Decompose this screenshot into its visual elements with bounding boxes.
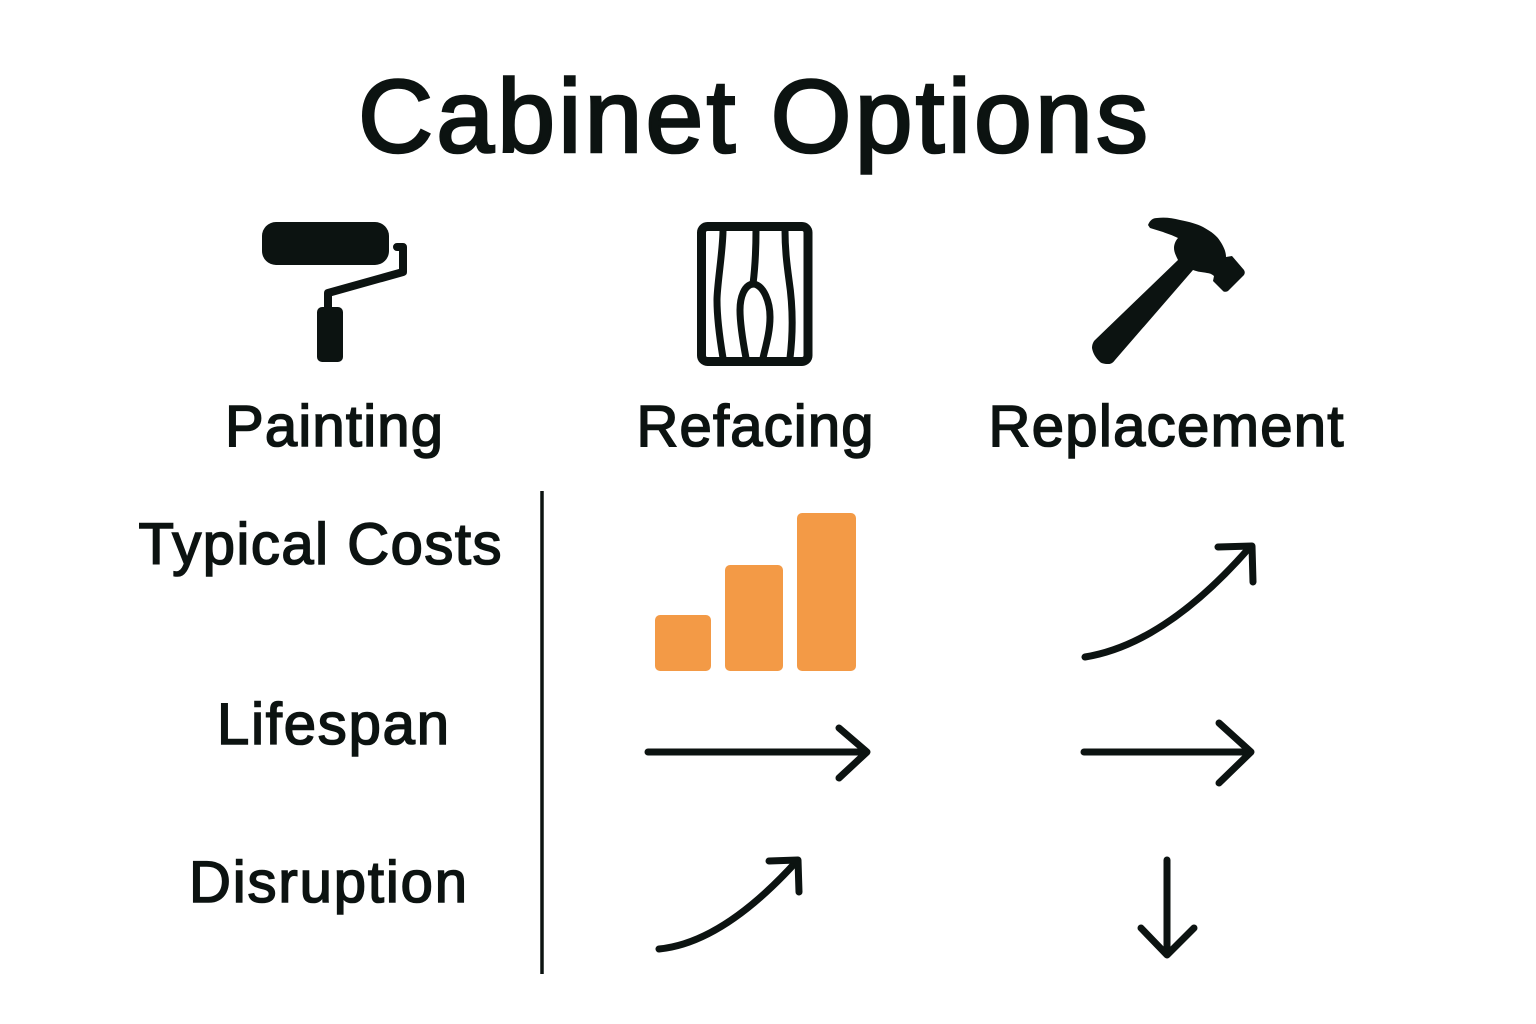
bar chart: typical costs (655, 513, 856, 671)
arrow: replacement disruption down (1141, 860, 1194, 955)
heading: Refacing: Refacing (636, 394, 874, 459)
vertical divider (540, 491, 544, 974)
arrow: replacement cost rising (1085, 546, 1253, 657)
icon: hammer (1092, 218, 1245, 364)
row label: Disruption: Disruption (189, 850, 467, 915)
row label: Typical Costs: Typical Costs (138, 512, 502, 577)
arrow: replacement lifespan flat (1084, 723, 1251, 783)
icon: paint roller (262, 222, 403, 362)
icon: wood panel (702, 226, 808, 362)
arrow: refacing disruption rising (659, 860, 799, 949)
heading: Replacement: Replacement (988, 394, 1344, 459)
title: Cabinet Options (358, 59, 1148, 175)
arrow: refacing lifespan flat (648, 728, 867, 778)
heading: Painting: Painting (225, 394, 443, 459)
row label: Lifespan: Lifespan (217, 692, 449, 757)
